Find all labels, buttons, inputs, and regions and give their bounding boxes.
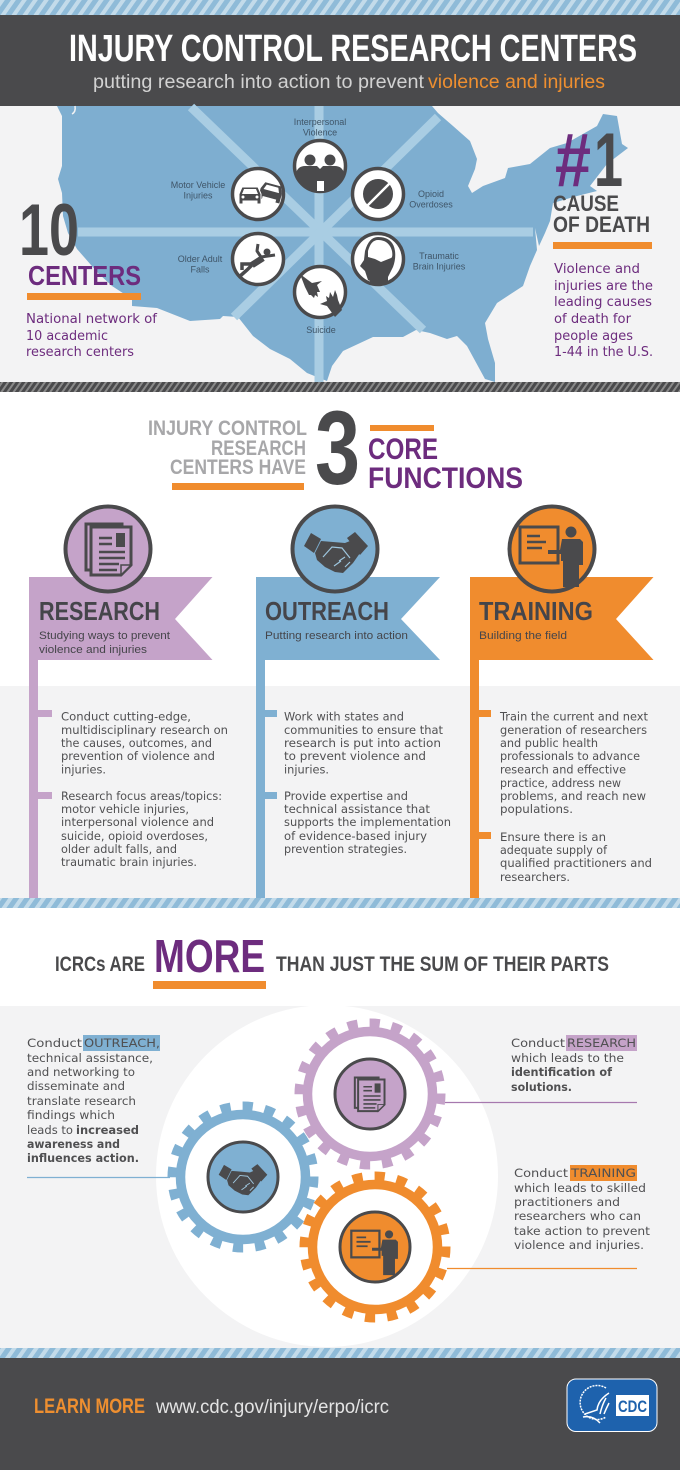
icon: trainer at board xyxy=(510,506,594,592)
heading: TRAINING xyxy=(479,596,593,626)
text: conduct outreach xyxy=(27,1035,160,1165)
blue stripe band xyxy=(0,898,680,908)
bullet markers xyxy=(479,710,491,839)
text: conduct outreach: findings which xyxy=(27,1108,115,1122)
body text: Ensure there is an xyxy=(500,830,606,844)
label: traumatic brain injuries: Traumatic xyxy=(419,251,459,261)
panel: training xyxy=(470,506,654,898)
orange bar xyxy=(553,242,652,249)
text: conduct outreach: influences action. xyxy=(27,1151,139,1165)
icon: motor vehicle injuries xyxy=(232,168,284,220)
description: Violence and xyxy=(554,262,640,277)
icon: traumatic brain injuries xyxy=(352,234,404,284)
tagline: Putting research into action xyxy=(265,630,408,642)
of death label: OF DEATH xyxy=(553,212,650,237)
description xyxy=(554,262,653,360)
stat: 10 centers xyxy=(19,190,157,360)
heading: three core functions xyxy=(148,390,523,507)
body text: communities to ensure that xyxy=(284,723,443,737)
label: motor vehicle injuries: Injuries xyxy=(183,190,213,200)
body text: supports the implementation xyxy=(284,815,451,829)
body text xyxy=(499,710,652,884)
body text: generation of researchers xyxy=(500,723,647,737)
text: conduct research: which leads to the xyxy=(511,1051,624,1065)
panel: research xyxy=(29,506,228,898)
orange bar left xyxy=(172,483,304,490)
description: National network of xyxy=(26,312,157,327)
grey band behind function columns xyxy=(0,686,680,898)
body text: technical assistance that xyxy=(284,802,430,816)
logo: cdc: CDC xyxy=(618,1397,647,1416)
label: opioid overdoses: Opioid xyxy=(418,189,444,199)
icon: older adult falls xyxy=(232,234,284,284)
centers label: CENTERS xyxy=(28,260,141,291)
body text: prevention of violence and xyxy=(61,749,215,763)
flag xyxy=(470,577,654,898)
text: conduct training: violence and injuries. xyxy=(514,1238,644,1252)
description: 1-44 in the U.S. xyxy=(554,345,653,360)
label: suicide: Suicide xyxy=(306,325,336,335)
core functions xyxy=(368,433,523,495)
body text: Work with states and xyxy=(284,710,404,724)
tagline: violence and injuries xyxy=(39,644,148,656)
text: conduct research xyxy=(511,1035,637,1094)
text: conduct research: solutions. xyxy=(511,1080,572,1094)
tagline: Studying ways to prevent xyxy=(39,630,170,642)
number 10: 10 xyxy=(19,190,79,271)
text: conduct outreach: OUTREACH, xyxy=(84,1036,160,1050)
body text: injuries. xyxy=(61,762,106,776)
description xyxy=(26,312,157,360)
description: injuries are the xyxy=(554,279,653,294)
connector lines xyxy=(27,1102,637,1268)
icon: document xyxy=(66,506,150,592)
body text: Research focus areas/topics: xyxy=(61,789,222,803)
stat: number one cause of death xyxy=(553,118,653,360)
label: older adult falls: Older Adult xyxy=(178,254,223,264)
logo: cdc xyxy=(567,1379,657,1432)
map spokes xyxy=(78,106,533,382)
text: conduct outreach: and networking to xyxy=(27,1065,135,1079)
orange bar right xyxy=(370,425,434,431)
blue stripe band xyxy=(0,1348,680,1358)
US map silhouette xyxy=(57,106,628,382)
heading: three core functions: RESEARCH xyxy=(211,437,306,460)
label: motor vehicle injuries: Motor Vehicle xyxy=(171,180,225,190)
text: conduct training: which leads to skilled xyxy=(514,1181,646,1195)
description: of death for xyxy=(554,312,632,327)
description: leading causes xyxy=(554,295,652,310)
text: conduct training xyxy=(514,1165,651,1252)
heading: RESEARCH xyxy=(39,596,160,626)
url: www.cdc.gov/injury/erpo/icrc xyxy=(155,1397,389,1418)
text: conduct training: researchers who can xyxy=(514,1209,641,1223)
label: traumatic brain injuries: Brain Injuries xyxy=(413,262,466,272)
description: 10 academic xyxy=(26,329,108,344)
label: interpersonal violence: Interpersonal xyxy=(294,117,346,127)
body text: and public health xyxy=(500,736,598,750)
heading: three core functions: INJURY CONTROL xyxy=(148,417,307,440)
text: conduct research: Conduct xyxy=(511,1036,566,1050)
body text: traumatic brain injuries. xyxy=(61,855,197,869)
body text: multidisciplinary research on xyxy=(61,723,228,737)
text: conduct training: Conduct xyxy=(514,1166,569,1180)
heading: OUTREACH xyxy=(265,596,389,626)
text: conduct research: RESEARCH xyxy=(567,1036,636,1050)
description: people ages xyxy=(554,329,633,344)
core functions: FUNCTIONS xyxy=(368,462,523,495)
body text: the causes, outcomes, and xyxy=(61,736,212,750)
label: interpersonal violence: Violence xyxy=(303,128,337,138)
body text: Provide expertise and xyxy=(284,789,408,803)
hash symbol: # xyxy=(555,118,591,203)
body text: older adult falls, and xyxy=(61,842,177,856)
body text: to prevent violence and xyxy=(284,749,426,763)
header panel xyxy=(0,15,680,106)
icon: opioid overdoses xyxy=(352,168,404,220)
bullet markers xyxy=(265,710,277,799)
flag xyxy=(256,577,440,898)
rest of heading: THAN JUST THE SUM OF THEIR PARTS xyxy=(276,953,609,976)
label: older adult falls: Falls xyxy=(190,264,210,274)
body text: suicide, opioid overdoses, xyxy=(61,829,208,843)
core functions: CORE xyxy=(368,433,438,466)
text: conduct outreach: translate research xyxy=(27,1094,136,1108)
tagline: Building the field xyxy=(479,630,567,642)
subtitle: putting research into action to prevent xyxy=(93,72,425,93)
body text: motor vehicle injuries, xyxy=(61,802,189,816)
gear: outreach xyxy=(172,1106,314,1248)
footer panel xyxy=(0,1358,680,1470)
heading: three core functions: CENTERS HAVE xyxy=(170,456,306,479)
Puget Sound notch xyxy=(72,106,75,114)
body text: populations. xyxy=(500,802,573,816)
text: conduct outreach: technical assistance, xyxy=(27,1051,153,1065)
flag xyxy=(29,577,212,898)
description: research centers xyxy=(26,345,134,360)
icon: handshake xyxy=(292,506,378,592)
body text xyxy=(61,710,228,869)
body text xyxy=(284,710,451,856)
text: conduct training: take action to prevent xyxy=(514,1224,651,1238)
panel: national map section xyxy=(0,106,680,382)
cause label: CAUSE xyxy=(553,191,619,216)
dark stripe band xyxy=(0,382,680,392)
emphasis word: MORE xyxy=(154,930,265,982)
body text: research and effective xyxy=(500,762,626,776)
label: opioid overdoses: Overdoses xyxy=(409,200,453,210)
icon: interpersonal violence xyxy=(294,140,346,192)
heading: more than the sum: ICRCs ARE xyxy=(55,953,145,976)
body text: researchers. xyxy=(500,870,570,884)
body text: professionals to advance xyxy=(500,749,640,763)
text: conduct training: practitioners and xyxy=(514,1195,620,1209)
icon: suicide xyxy=(294,266,346,318)
body text: research is put into action xyxy=(284,736,441,750)
gear: research xyxy=(299,1023,441,1165)
panel: gears section xyxy=(0,1005,680,1348)
orange bar xyxy=(153,981,266,989)
text: conduct outreach: leads to xyxy=(27,1123,73,1137)
body text: qualified practitioners and xyxy=(500,856,652,870)
learn more: LEARN MORE xyxy=(34,1395,145,1418)
bullet markers xyxy=(38,710,52,799)
top stripe band xyxy=(0,0,680,15)
text: conduct outreach: disseminate and xyxy=(27,1079,125,1093)
text: conduct training: TRAINING xyxy=(570,1166,636,1180)
body text: Conduct cutting-edge, xyxy=(61,710,191,724)
text: conduct research: identification of xyxy=(511,1065,613,1079)
numeral 1: 1 xyxy=(594,118,623,203)
text: conduct outreach: increased xyxy=(76,1123,139,1137)
body text: problems, and reach new xyxy=(500,789,646,803)
body text: of evidence-based injury xyxy=(284,829,427,843)
body text: interpersonal violence and xyxy=(61,815,214,829)
panel: outreach xyxy=(256,506,451,898)
big number 3: 3 xyxy=(315,390,360,507)
body text: injuries. xyxy=(284,762,329,776)
body text: Train the current and next xyxy=(499,710,648,724)
body text: adequate supply of xyxy=(500,843,608,857)
gear: training xyxy=(304,1176,446,1318)
heading: more than the sum xyxy=(55,930,609,989)
body text: prevention strategies. xyxy=(284,842,407,856)
body text: practice, address new xyxy=(500,776,621,790)
subtitle highlight: violence and injuries xyxy=(428,72,605,93)
tagline xyxy=(39,630,170,656)
text: conduct outreach: awareness and xyxy=(27,1137,120,1151)
orange bar xyxy=(27,293,141,300)
white circle backdrop xyxy=(156,1005,498,1347)
text: conduct outreach: Conduct xyxy=(27,1036,83,1050)
